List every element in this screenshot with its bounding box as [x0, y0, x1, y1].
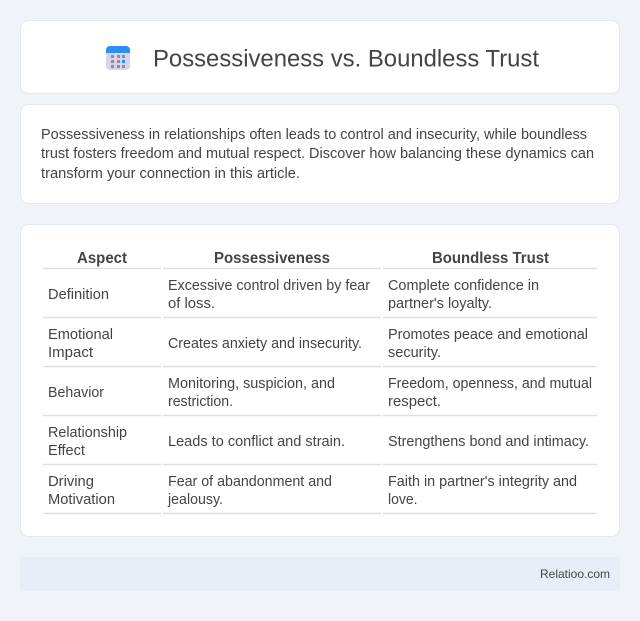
row: emotional impact: security. — [388, 345, 441, 361]
row: definition: of loss. — [168, 296, 215, 312]
row: definition: Excessive control driven by fear — [168, 278, 370, 294]
row: driving motivation: Motivation — [48, 492, 115, 508]
footer — [20, 557, 620, 591]
row: behavior: Behavior — [48, 385, 104, 401]
table header: Boundless Trust — [432, 250, 550, 267]
row: emotional impact: Creates anxiety and insecurity. — [168, 336, 362, 352]
row: emotional impact: Emotional — [48, 327, 113, 343]
row: relationship effect: Relationship — [48, 425, 127, 441]
footer credit: Relatioo.com — [540, 567, 610, 581]
row: relationship effect: Leads to conflict and strain. — [168, 434, 345, 450]
row: behavior: respect. — [388, 394, 441, 410]
intro text — [41, 127, 594, 182]
panel: header — [20, 20, 620, 94]
row: emotional impact — [43, 327, 597, 366]
row: behavior — [43, 376, 597, 416]
table header: Possessiveness — [214, 250, 330, 267]
row: emotional impact: Promotes peace and emotional — [388, 327, 588, 343]
icon: calendar — [106, 46, 130, 70]
intro text: trust fosters freedom and mutual respect. Discover how balancing these dynamics can — [41, 146, 594, 162]
row: driving motivation: love. — [388, 492, 418, 508]
row: behavior: restriction. — [168, 394, 233, 410]
row: emotional impact: Impact — [48, 345, 93, 361]
row: behavior: Monitoring, suspicion, and — [168, 376, 335, 392]
row: relationship effect — [43, 425, 597, 464]
row: definition — [43, 278, 597, 318]
row: relationship effect: Effect — [48, 443, 85, 459]
row: driving motivation: jealousy. — [167, 492, 223, 508]
row: behavior: Freedom, openness, and mutual — [388, 376, 592, 392]
row: definition: Complete confidence in — [388, 278, 539, 294]
row: relationship effect: Strengthens bond and intimacy. — [388, 434, 589, 450]
panel: intro — [20, 104, 620, 204]
title: Possessiveness vs. Boundless Trust — [153, 46, 539, 72]
panel: comparison table — [20, 224, 620, 536]
row: driving motivation: Faith in partner's integrity and — [388, 474, 577, 490]
row: driving motivation: Fear of abandonment and — [168, 474, 332, 490]
table header: Aspect — [77, 250, 128, 267]
intro text: Possessiveness in relationships often leads to control and insecurity, while boundless — [41, 127, 587, 143]
intro text: transform your connection in this article. — [41, 166, 300, 182]
row: definition: Definition — [48, 287, 109, 303]
row: driving motivation — [43, 474, 597, 514]
row: driving motivation: Driving — [48, 474, 94, 490]
row: definition: partner's loyalty. — [388, 296, 492, 312]
table header — [43, 250, 597, 268]
